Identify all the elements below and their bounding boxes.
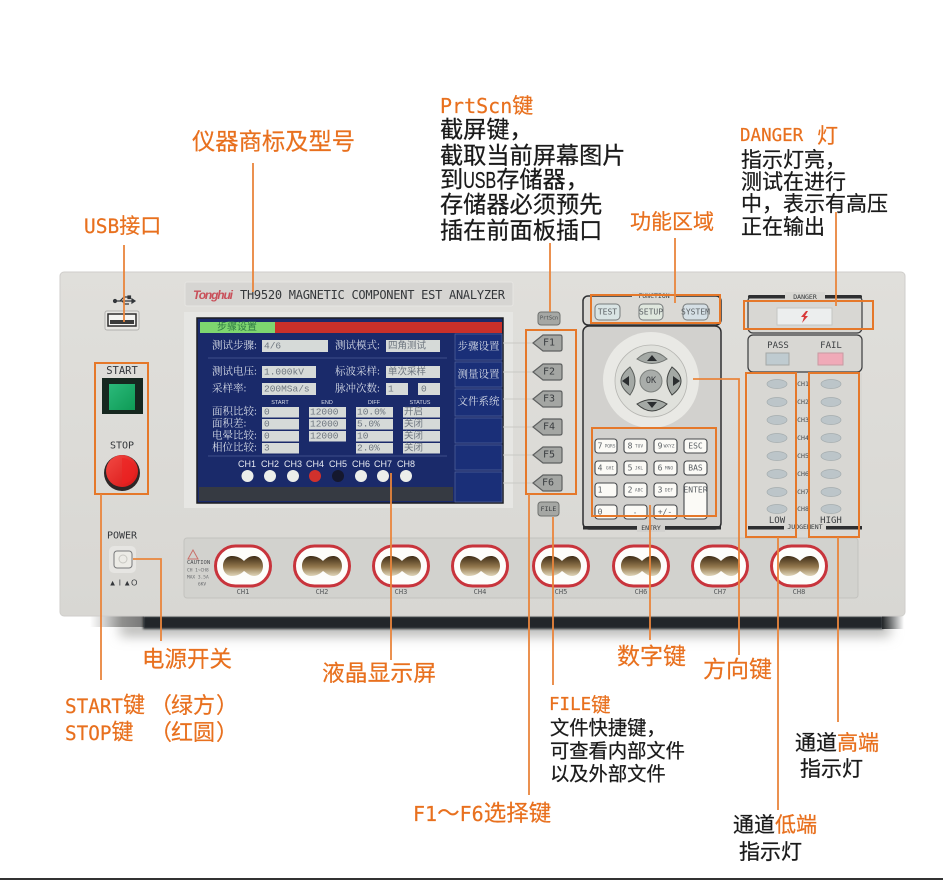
text block: danger lamp: 正在输出 bbox=[741, 215, 825, 239]
label: start and stop keys: STOP键 bbox=[65, 720, 133, 746]
socket labels: CH4 bbox=[474, 588, 486, 596]
judgement leds: LOW bbox=[769, 516, 786, 526]
pass and fail lamps: PASS bbox=[767, 341, 789, 351]
caution note: CH 1~CH8 bbox=[187, 568, 209, 574]
lcd screen bbox=[197, 318, 503, 503]
settings form: 采样率: bbox=[212, 382, 246, 394]
entry key group bbox=[583, 326, 721, 532]
settings form: 测试电压: bbox=[212, 364, 257, 378]
label: start and stop keys: 红圆 bbox=[171, 720, 215, 746]
numeric keypad: . bbox=[633, 506, 637, 516]
icon: usb symbol bbox=[114, 296, 135, 304]
soft-key menu: 文件系统 bbox=[458, 394, 500, 408]
direction dial: OK bbox=[646, 376, 657, 386]
danger indicator bbox=[748, 292, 862, 333]
comparison table: 面积差: bbox=[212, 416, 246, 430]
F1-F6 soft keys bbox=[533, 335, 562, 491]
text block: file key: 可查看内部文件 bbox=[550, 740, 685, 762]
comparison table: START bbox=[271, 400, 289, 406]
prtscn button: PrtScn bbox=[540, 316, 558, 322]
function key group bbox=[583, 292, 721, 325]
text block: file key: 文件快捷键， bbox=[550, 716, 666, 740]
prtscn button bbox=[538, 312, 560, 325]
soft-key menu bbox=[455, 334, 502, 502]
comparison table: 0 bbox=[264, 418, 270, 430]
channel labels: CH7 bbox=[797, 488, 809, 496]
comparison table: 10 bbox=[357, 430, 369, 442]
caution note: CAUTION bbox=[187, 560, 210, 566]
numeric keypad: 0 bbox=[598, 508, 603, 516]
judgement leds: HIGH bbox=[820, 516, 842, 526]
comparison table: 5.0% bbox=[357, 418, 380, 430]
highlight boxes bbox=[95, 295, 873, 537]
comparison table: 电晕比较: bbox=[212, 428, 257, 442]
danger indicator: DANGER bbox=[793, 293, 817, 301]
settings form: 脉冲次数: bbox=[335, 382, 380, 394]
function key group: FUNCTION bbox=[638, 292, 670, 300]
numeric keypad: TUV bbox=[635, 444, 643, 450]
numeric keypad: 8 bbox=[628, 442, 633, 450]
settings form: 测试模式: bbox=[335, 338, 380, 352]
F1-F6 soft keys: F5 bbox=[543, 450, 555, 460]
F1-F6 soft keys: F1 bbox=[543, 338, 555, 348]
channel status: CH3 bbox=[284, 459, 302, 469]
numeric keypad: 1 bbox=[598, 486, 603, 494]
socket labels: CH6 bbox=[635, 588, 647, 596]
text block: low side indicator: 通道低端 bbox=[733, 813, 817, 837]
function key group: SETUP bbox=[639, 308, 663, 316]
channel status: CH8 bbox=[397, 459, 415, 469]
text block: low side indicator: 指示灯 bbox=[739, 840, 802, 864]
channel status: CH7 bbox=[374, 459, 392, 469]
entry key group: ENTRY bbox=[641, 524, 661, 532]
numeric keypad: ABC bbox=[635, 488, 643, 494]
label: brand and model: 仪器商标及型号 bbox=[192, 128, 355, 156]
text block: prtscn key: 插在前面板插口 bbox=[440, 218, 602, 244]
numeric keypad: 5 bbox=[628, 464, 633, 472]
soft-key menu: 步骤设置 bbox=[458, 340, 500, 352]
text block: file key bbox=[549, 694, 685, 786]
channel labels: CH2 bbox=[797, 398, 809, 406]
numeric keypad: ENTER bbox=[683, 486, 708, 494]
text block: file key: FILE键 bbox=[549, 694, 611, 716]
text block: prtscn key: 截屏键， bbox=[440, 116, 533, 144]
socket labels: CH1 bbox=[237, 588, 249, 596]
pass and fail lamps bbox=[748, 335, 862, 372]
label: usb port: USB接口 bbox=[84, 214, 161, 238]
channel status: CH1 bbox=[238, 459, 256, 469]
function key group: TEST bbox=[598, 308, 617, 316]
numeric keypad: 2 bbox=[628, 486, 633, 494]
text block: prtscn key: 到USB存储器， bbox=[440, 166, 589, 194]
channel sockets bbox=[216, 546, 826, 586]
comparison table: 0 bbox=[264, 406, 270, 418]
comparison table bbox=[208, 400, 447, 456]
soft-key menu: 测量设置 bbox=[458, 368, 500, 380]
comparison table: 10.0% bbox=[357, 406, 386, 418]
text block: low side indicator bbox=[733, 813, 817, 864]
F1-F6 soft keys: F2 bbox=[543, 366, 555, 378]
status bar bbox=[199, 487, 453, 501]
label: start and stop keys bbox=[65, 694, 238, 746]
comparison table: 关闭 bbox=[404, 430, 423, 442]
judgement leds bbox=[748, 373, 862, 531]
text block: high side indicator: 指示灯 bbox=[800, 757, 863, 781]
label: power switch: 电源开关 bbox=[142, 647, 232, 673]
numeric keypad: 7 bbox=[598, 442, 603, 450]
numeric keypad: DEF bbox=[665, 488, 673, 494]
channel labels: CH6 bbox=[797, 470, 809, 478]
comparison table: 相位比较: bbox=[212, 440, 257, 454]
brand logo: Tonghui bbox=[193, 288, 234, 302]
stop button bbox=[104, 440, 140, 491]
channel status: CH5 bbox=[329, 459, 347, 469]
label: start and stop keys: （ bbox=[150, 694, 172, 718]
text block: danger lamp: 中，表示有高压 bbox=[741, 192, 888, 216]
numeric keypad: ESC bbox=[688, 442, 703, 450]
settings form: 四角测试 bbox=[388, 340, 427, 352]
numeric keypad: WXYZ bbox=[664, 444, 675, 450]
numeric keypad: 3 bbox=[658, 486, 663, 494]
settings form: 0 bbox=[421, 384, 427, 394]
label: start and stop keys: 绿方 bbox=[171, 694, 215, 718]
numeric keypad: PQRS bbox=[605, 444, 616, 450]
comparison table: 12000 bbox=[310, 430, 339, 442]
model name: TH9520 MAGNETIC COMPONENT EST ANALYZER bbox=[240, 288, 506, 302]
start button: START bbox=[106, 365, 138, 377]
socket labels: CH7 bbox=[714, 588, 726, 596]
text block: danger lamp: DANGER bbox=[740, 126, 804, 146]
comparison table: STATUS bbox=[410, 400, 431, 406]
channel status: CH4 bbox=[306, 459, 324, 469]
text block: danger lamp: 指示灯亮， bbox=[741, 148, 846, 172]
comparison table: 面积比较: bbox=[212, 404, 257, 418]
label: start and stop keys: START键 bbox=[65, 694, 145, 718]
channel labels: CH5 bbox=[797, 452, 809, 460]
power switch: ▲ I ▲O bbox=[109, 578, 137, 588]
nameplate bbox=[185, 282, 513, 306]
socket labels: CH3 bbox=[395, 588, 407, 596]
start button bbox=[102, 365, 143, 414]
guide lines from soft keys bbox=[503, 343, 533, 483]
settings form: 测试步骤: bbox=[212, 338, 257, 352]
caution note bbox=[187, 550, 210, 588]
text block: high side indicator bbox=[795, 731, 879, 781]
socket strip bbox=[184, 538, 858, 598]
settings form: 200MSa/s bbox=[264, 384, 310, 394]
numeric keypad bbox=[595, 439, 708, 519]
numeric keypad: JKL bbox=[635, 466, 643, 472]
settings form: 1.000kV bbox=[264, 366, 304, 378]
file button: FILE bbox=[541, 505, 556, 513]
numeric keypad: MNO bbox=[665, 466, 673, 472]
function key group: SYSTEM bbox=[681, 308, 710, 316]
settings form: 单次采样 bbox=[388, 366, 426, 378]
socket labels: CH5 bbox=[555, 588, 567, 596]
settings form: 标波采样: bbox=[335, 364, 380, 378]
text block: prtscn key: PrtScn键 bbox=[440, 94, 533, 118]
settings form bbox=[208, 338, 447, 395]
numeric keypad: 4 bbox=[598, 464, 603, 472]
numeric keypad: 6 bbox=[658, 464, 663, 472]
label: lcd: 液晶显示屏 bbox=[322, 661, 436, 687]
channel status bbox=[238, 459, 415, 482]
comparison table: END bbox=[321, 400, 333, 406]
numeric keypad: 9 bbox=[658, 442, 663, 450]
comparison table: 3 bbox=[264, 442, 270, 454]
bottom rule bbox=[0, 878, 943, 880]
F1-F6 soft keys: F6 bbox=[542, 478, 554, 488]
pass and fail lamps: FAIL bbox=[820, 341, 842, 351]
comparison table: 关闭 bbox=[404, 418, 423, 430]
channel labels bbox=[797, 380, 809, 513]
numeric keypad: GHI bbox=[606, 466, 614, 472]
comparison table: 关闭 bbox=[404, 442, 423, 454]
leader lines bbox=[101, 163, 838, 810]
comparison table: 12000 bbox=[310, 418, 339, 430]
numeric keypad: +/- bbox=[658, 508, 672, 516]
socket labels: CH8 bbox=[793, 588, 805, 596]
text block: high side indicator: 通道高端 bbox=[795, 731, 879, 755]
label: f1-f6 keys: F1～F6选择键 bbox=[413, 801, 551, 827]
comparison table: DIFF bbox=[368, 400, 381, 406]
text block: file key: 以及外部文件 bbox=[550, 762, 666, 786]
text block: prtscn key bbox=[440, 94, 626, 244]
label: direction keys: 方向键 bbox=[703, 657, 772, 683]
comparison table: 开启 bbox=[404, 406, 423, 418]
settings form: 4/6 bbox=[264, 340, 281, 352]
F1-F6 soft keys: F3 bbox=[543, 394, 555, 404]
F1-F6 soft keys: F4 bbox=[543, 422, 555, 432]
text block: prtscn key: 截取当前屏幕图片 bbox=[440, 142, 626, 170]
channel labels: CH4 bbox=[797, 434, 809, 442]
numeric keypad: BAS bbox=[688, 464, 703, 472]
direction dial bbox=[603, 332, 699, 428]
stop button: STOP bbox=[110, 440, 134, 452]
text block: danger lamp: 测试在进行 bbox=[741, 170, 846, 194]
comparison table: 12000 bbox=[310, 406, 339, 418]
text block: danger lamp bbox=[740, 124, 888, 239]
caution note: 6KV bbox=[198, 582, 206, 588]
channel labels: CH1 bbox=[797, 380, 809, 388]
comparison table: 2.0% bbox=[357, 442, 380, 454]
power switch: POWER bbox=[107, 530, 138, 542]
judgement leds: JUDGEMENT bbox=[787, 523, 823, 531]
label: start and stop keys: ） bbox=[216, 694, 238, 718]
label: start and stop keys: （ bbox=[150, 720, 172, 746]
icon: lightning bbox=[801, 311, 808, 323]
file button bbox=[538, 502, 559, 516]
high side leds bbox=[821, 380, 841, 514]
settings form: 1 bbox=[388, 384, 394, 394]
channel labels: CH8 bbox=[797, 505, 809, 513]
title bar: 步骤设置 bbox=[217, 321, 257, 333]
usb port bbox=[105, 311, 139, 330]
label: number keys: 数字键 bbox=[617, 644, 686, 670]
instrument shadow bbox=[90, 616, 904, 636]
power switch bbox=[107, 530, 138, 588]
channel status: CH6 bbox=[352, 459, 370, 469]
comparison table: 0 bbox=[264, 430, 270, 442]
title bar bbox=[200, 321, 502, 333]
label: function area: 功能区域 bbox=[630, 210, 714, 234]
text block: prtscn key: 存储器必须预先 bbox=[440, 192, 602, 218]
caution note: MAX 3.5A bbox=[187, 574, 209, 580]
text block: danger lamp: 灯 bbox=[817, 124, 838, 148]
label: start and stop keys: ） bbox=[216, 720, 238, 746]
instrument front panel bbox=[60, 272, 905, 616]
socket labels: CH2 bbox=[316, 588, 328, 596]
channel status: CH2 bbox=[261, 459, 279, 469]
lcd bezel bbox=[184, 312, 513, 508]
channel labels: CH3 bbox=[797, 416, 809, 424]
low side leds bbox=[767, 380, 787, 514]
socket labels bbox=[237, 588, 805, 596]
